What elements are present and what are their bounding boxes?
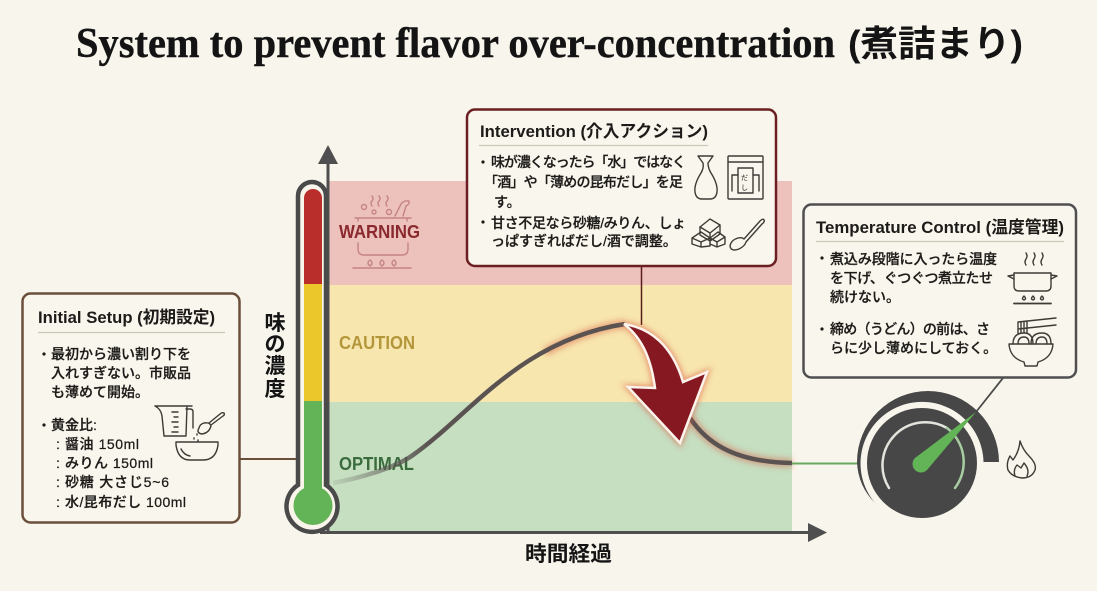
- text block: lower the heat: を下げ、ぐつぐつ煮立たせ: [830, 270, 993, 286]
- text block: golden ratio: :: [56, 494, 60, 510]
- icon: udon bowl: [1009, 318, 1056, 366]
- chart zones: [328, 181, 792, 532]
- connector: dial to curve: [792, 462, 858, 464]
- thermometer: [286, 182, 337, 532]
- text block: lower the heat: 煮込み段階に入ったら温度: [830, 251, 997, 267]
- icon: boiling pot in warning zone: [353, 196, 411, 268]
- zone: caution: [328, 285, 792, 402]
- panel heading: initial setup: Initial Setup (初期設定): [38, 308, 215, 327]
- text block: seasoning advice: 甘さ不足なら砂糖/みりん、しょ: [491, 215, 686, 231]
- thermometer yellow segment: [304, 284, 322, 401]
- y axis arrow: [318, 145, 338, 532]
- zone label: warning: WARNING: [339, 222, 420, 242]
- y axis label: [264, 312, 286, 401]
- text block: setup advice: も薄めて開始。: [51, 384, 149, 400]
- text block: lower the heat: [820, 251, 997, 305]
- dial outer arc: [857, 391, 999, 503]
- text block: seasoning advice: [481, 215, 686, 249]
- text block: golden ratio: :: [56, 455, 60, 471]
- title: (煮詰まり): [848, 23, 1023, 64]
- icon: sugar cubes: [692, 219, 725, 247]
- x axis arrow: [320, 523, 827, 542]
- text block: dilution advice: 味が濃くなったら「水」ではなく: [491, 154, 686, 170]
- icon: simmering pot: [1008, 253, 1057, 304]
- panel: initial setup: [22, 294, 240, 522]
- text block: golden ratio: 砂糖 大さじ5~6: [65, 474, 169, 490]
- connector: temperature panel to dial: [976, 378, 1003, 412]
- icon: measuring cup, spoon and bowl: [155, 406, 224, 460]
- text block: dilution advice: 「酒」や「薄めの昆布だし」を足: [484, 174, 683, 190]
- text block: golden ratio: :: [56, 436, 60, 452]
- text block: lower the heat: 続けない。: [830, 289, 900, 305]
- text block: finishing udon: らに少し薄めにしておく。: [830, 340, 997, 356]
- text block: golden ratio: 黄金比:: [51, 417, 97, 433]
- text block: setup advice: 入れすぎない。市販品: [51, 365, 191, 381]
- dial knob: [867, 408, 977, 518]
- icon: sake bottle: [695, 156, 717, 199]
- text block: golden ratio: :: [56, 474, 60, 490]
- thermometer red segment: [304, 189, 322, 284]
- x axis label: 時間経過: [525, 543, 612, 566]
- text block: finishing udon: [820, 321, 997, 356]
- zone: warning: [328, 181, 792, 285]
- panel: intervention: [467, 110, 776, 266]
- panel heading: intervention: Intervention (介入アクション): [480, 122, 708, 141]
- text block: golden ratio: [42, 417, 186, 510]
- icon: dashi pack: [728, 156, 763, 199]
- zone label: caution: CAUTION: [339, 333, 415, 353]
- text block: seasoning advice: っぱすぎればだし/酒で調整。: [491, 233, 677, 249]
- zone: optimal: [328, 402, 792, 532]
- connector: initial setup to thermometer: [240, 458, 296, 460]
- y axis label: 濃: [264, 355, 286, 378]
- y axis label: 味: [264, 312, 286, 335]
- flavor concentration curve: [333, 324, 792, 483]
- text block: golden ratio: みりん 150ml: [65, 455, 153, 471]
- icon: flame: [1007, 441, 1035, 478]
- y axis label: 度: [264, 378, 286, 401]
- title: System to prevent flavor over-concentration: [76, 21, 835, 67]
- zone label: optimal: OPTIMAL: [339, 454, 414, 474]
- dial needle: [913, 412, 976, 472]
- text block: dilution advice: [481, 154, 686, 210]
- text block: setup advice: [42, 346, 191, 400]
- icon: dashi pack: だ: [741, 174, 748, 182]
- text block: golden ratio: 醤油 150ml: [65, 436, 139, 452]
- panel: temperature control: [804, 204, 1076, 378]
- thermometer green segment and bulb: [294, 401, 332, 525]
- temperature dial: [857, 391, 999, 518]
- dial inner scale: [882, 422, 964, 488]
- text block: dilution advice: す。: [494, 194, 521, 210]
- text block: finishing udon: 締め（うどん）の前は、さ: [830, 321, 990, 337]
- panel heading: temperature control: Temperature Control (温度管理): [816, 217, 1064, 237]
- axes: [318, 145, 827, 542]
- icon: spoon: [730, 219, 764, 250]
- text block: golden ratio: 水/昆布だし 100ml: [65, 494, 186, 510]
- text block: setup advice: 最初から濃い割り下を: [51, 346, 191, 362]
- y axis label: の: [264, 333, 286, 356]
- connector: intervention to curve: [640, 266, 642, 325]
- red downward arrow: [624, 324, 707, 443]
- icon: dashi pack: し: [741, 184, 748, 192]
